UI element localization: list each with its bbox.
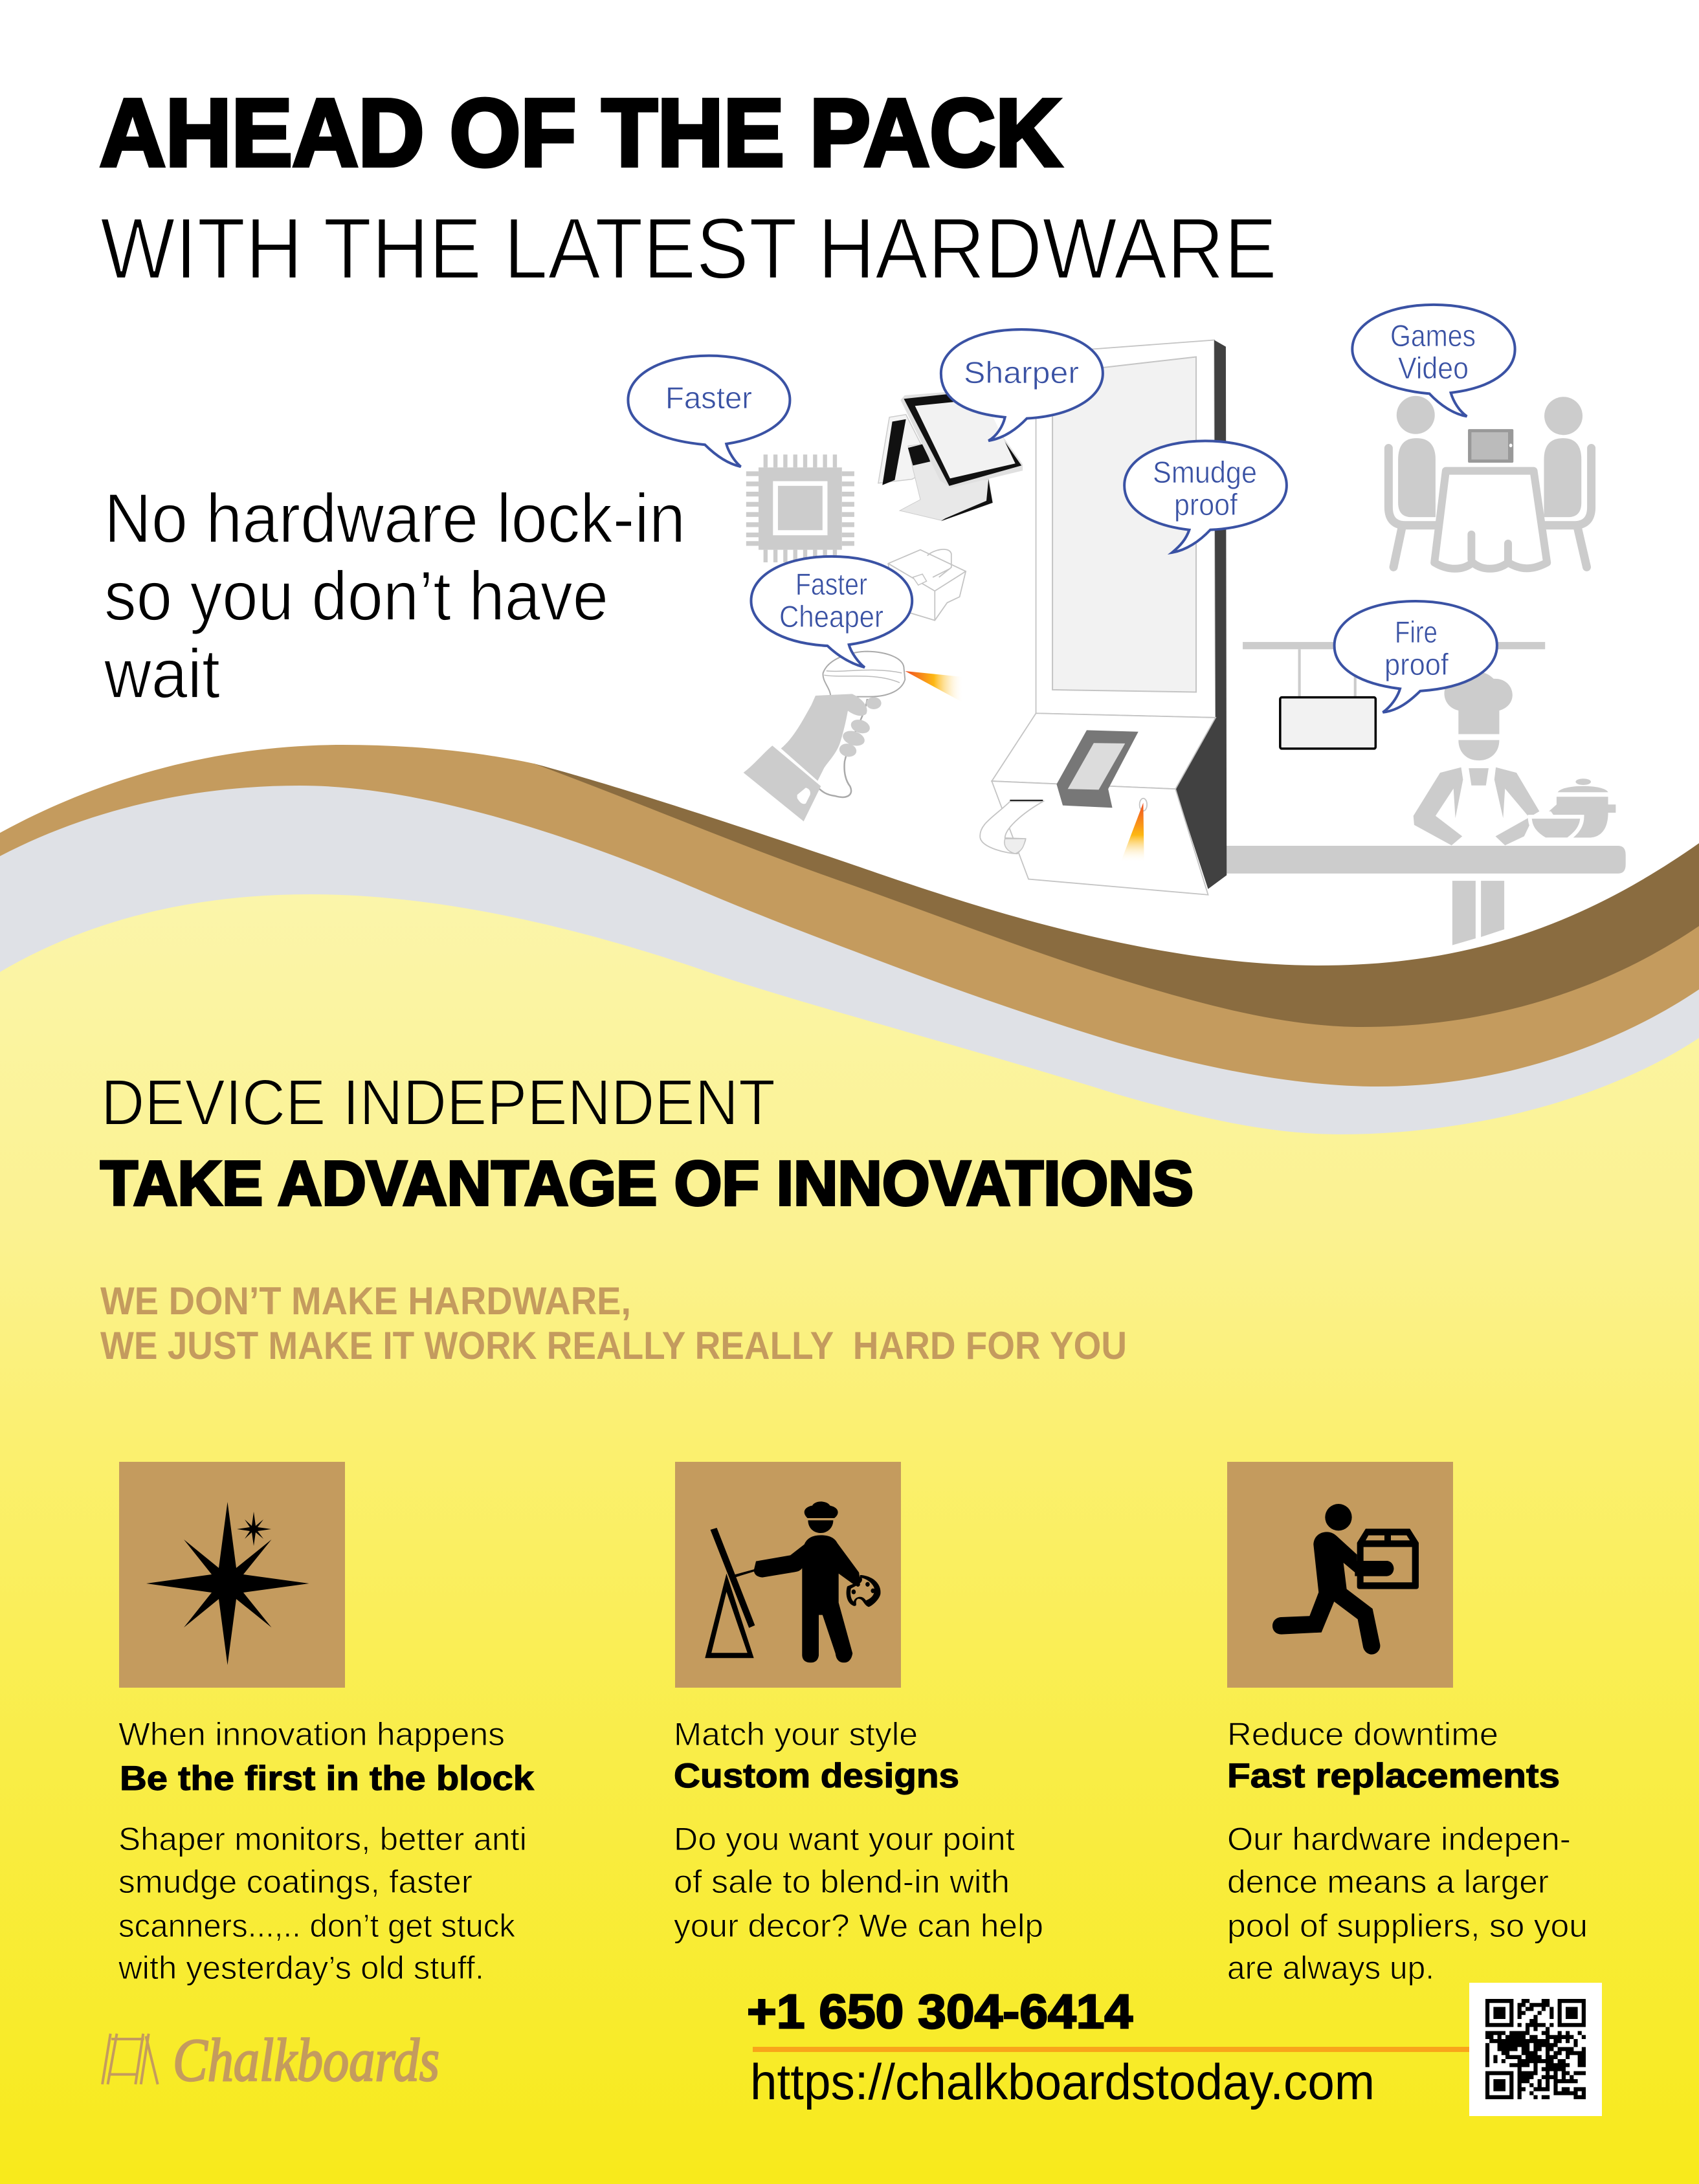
scanner beam xyxy=(905,671,962,702)
main screen xyxy=(915,399,1016,478)
column 1: be the first: Be the first in the block xyxy=(120,1759,535,1798)
speech bubble: Faster xyxy=(628,356,790,467)
pot xyxy=(1575,778,1591,785)
stand xyxy=(900,444,993,520)
contact: phone number: +1 650 304-6414 xyxy=(747,1985,1133,2038)
text block: no hardware lock-in xyxy=(104,479,685,712)
text block: no hardware lock-in: wait xyxy=(104,634,220,712)
kiosk base front xyxy=(992,781,1208,895)
text block: no hardware lock-in: so you don’t have xyxy=(104,557,608,635)
speech bubble: Fire proof: Fire xyxy=(1395,615,1438,649)
background wave: tan band xyxy=(0,745,1699,1165)
column 3: fast replacements: Fast replacements xyxy=(1227,1757,1560,1795)
column 2: custom designs: Match your style xyxy=(674,1716,918,1752)
column 1: be the first: When innovation happens xyxy=(118,1716,505,1752)
runner head xyxy=(1325,1504,1352,1530)
column 1: be the first: Shaper monitors, better anti xyxy=(118,1821,527,1857)
logo easel icon xyxy=(102,2034,158,2084)
speech bubble: Faster: Faster xyxy=(665,381,752,415)
column 3: fast replacements xyxy=(1227,1716,1588,1986)
speech bubble: Games Video: Games xyxy=(1390,318,1476,353)
text block: no hardware lock-in: No hardware lock-in xyxy=(104,479,685,557)
column 1: be the first: scanners...,.. don’t get stuck xyxy=(118,1908,516,1944)
title xyxy=(100,80,1277,297)
fingers xyxy=(866,697,882,709)
speech bubble: Sharper xyxy=(941,329,1103,441)
column 2: custom designs: Do you want your point xyxy=(674,1821,1015,1857)
speech bubble: Sharper: Sharper xyxy=(964,355,1079,390)
column 3: fast replacements: pool of suppliers, so you xyxy=(1227,1908,1588,1944)
column 1: be the first xyxy=(118,1716,535,1986)
kiosk scanner beam xyxy=(1140,799,1147,811)
kitchen display screen xyxy=(1280,698,1375,749)
column 1: be the first: with yesterday’s old stuff. xyxy=(118,1950,484,1986)
hand xyxy=(781,694,867,781)
column 3: fast replacements: dence means a larger xyxy=(1227,1864,1549,1900)
speech bubble: Faster Cheaper: Cheaper xyxy=(779,599,883,634)
kiosk monitor xyxy=(1036,340,1216,718)
scanner handle xyxy=(817,699,867,797)
illustration: diners at table with tablet xyxy=(1388,396,1592,569)
speech bubble: Smudge proof: proof xyxy=(1174,487,1238,522)
receipt printer xyxy=(1010,800,1043,802)
title line 2: WITH THE LATEST HARDWARE xyxy=(100,201,1277,297)
background wave: dark brown band xyxy=(534,764,1699,1165)
column 2: custom designs: Custom designs xyxy=(674,1757,959,1795)
palette xyxy=(847,1575,881,1607)
column 3: fast replacements: are always up. xyxy=(1227,1950,1434,1986)
background wave: grey band xyxy=(0,786,1699,1230)
column 2: custom designs xyxy=(674,1716,1043,1944)
payment terminal xyxy=(1056,730,1138,808)
illustration: dual-screen POS terminal xyxy=(878,390,1023,521)
kiosk dark side xyxy=(1175,340,1227,889)
title line 1: AHEAD OF THE PACK xyxy=(100,80,1061,186)
contact divider xyxy=(753,2047,1470,2052)
QR code xyxy=(1469,1983,1602,2116)
parcel box xyxy=(1357,1528,1419,1589)
column 2: custom designs: your decor? We can help xyxy=(674,1908,1043,1944)
kiosk base top xyxy=(992,713,1216,789)
table cloth xyxy=(1434,471,1547,569)
illustration: self-order kiosk xyxy=(980,340,1227,895)
column 3: fast replacements: Our hardware indepen- xyxy=(1227,1821,1571,1857)
tablet xyxy=(1468,429,1513,463)
speech bubble: Faster Cheaper xyxy=(751,557,912,667)
logo: Chalkboards xyxy=(102,2027,439,2094)
runner arm xyxy=(1355,1561,1394,1576)
heading: device independent xyxy=(100,1066,1194,1219)
illustration: processor chip xyxy=(746,454,854,562)
illustration: chef with pot xyxy=(1414,671,1616,845)
easel xyxy=(705,1574,754,1658)
painter face xyxy=(808,1520,833,1533)
illustration: kitchen rail and display xyxy=(1243,642,1545,749)
speech bubble: Smudge proof xyxy=(1124,441,1287,553)
diner heads xyxy=(1397,396,1435,434)
logo wordmark: Chalkboards xyxy=(173,2027,439,2094)
speech bubble: Fire proof xyxy=(1335,601,1497,712)
background: yellow gradient panel xyxy=(0,894,1699,2184)
column 1: be the first: smudge coatings, faster xyxy=(118,1864,472,1900)
column 3: fast replacements: Reduce downtime xyxy=(1227,1716,1498,1752)
bowl xyxy=(1530,817,1582,839)
diner torsos xyxy=(1398,438,1436,517)
chairs xyxy=(1388,448,1440,567)
speech bubble: Faster Cheaper: Faster xyxy=(795,567,867,601)
runner body xyxy=(1272,1532,1380,1655)
illustration: receipt printer box xyxy=(888,549,966,621)
chef arms and body xyxy=(1414,767,1463,845)
paint brush xyxy=(735,1569,755,1577)
contact: website url: https://chalkboardstoday.com xyxy=(750,2053,1375,2110)
tagline: WE JUST MAKE IT WORK REALLY REALLY HARD FOR YOU xyxy=(100,1324,1127,1367)
scanner head xyxy=(823,652,905,697)
chef hat xyxy=(1444,671,1513,734)
icon: painter at easel xyxy=(675,1462,901,1688)
column 2: custom designs: of sale to blend-in with xyxy=(674,1864,1010,1900)
tagline xyxy=(100,1279,1127,1367)
kiosk screen xyxy=(1052,357,1196,692)
sleeve xyxy=(744,745,821,821)
speech bubble: Fire proof: proof xyxy=(1384,647,1449,681)
speech bubble: Games Video: Video xyxy=(1398,351,1469,385)
painter body xyxy=(754,1535,860,1662)
icon: sparkle star xyxy=(119,1462,345,1688)
main screen bezel xyxy=(900,390,1023,488)
heading: device independent: DEVICE INDEPENDENT xyxy=(101,1066,775,1139)
chef face xyxy=(1458,740,1499,760)
painter hat xyxy=(805,1501,838,1518)
illustration: hand with barcode scanner xyxy=(744,652,962,821)
icon: delivery runner with box xyxy=(1227,1462,1453,1688)
illustration: counter behind kiosk xyxy=(1215,846,1626,945)
back screen xyxy=(878,415,933,483)
speech bubble: Games Video xyxy=(1352,305,1515,416)
canvas board xyxy=(711,1528,755,1628)
tagline: WE DON’T MAKE HARDWARE, xyxy=(100,1279,631,1323)
heading: take advantage of innovations: TAKE ADVANTAGE OF INNOVATIONS xyxy=(100,1148,1194,1219)
speech bubble: Smudge proof: Smudge xyxy=(1153,455,1257,489)
